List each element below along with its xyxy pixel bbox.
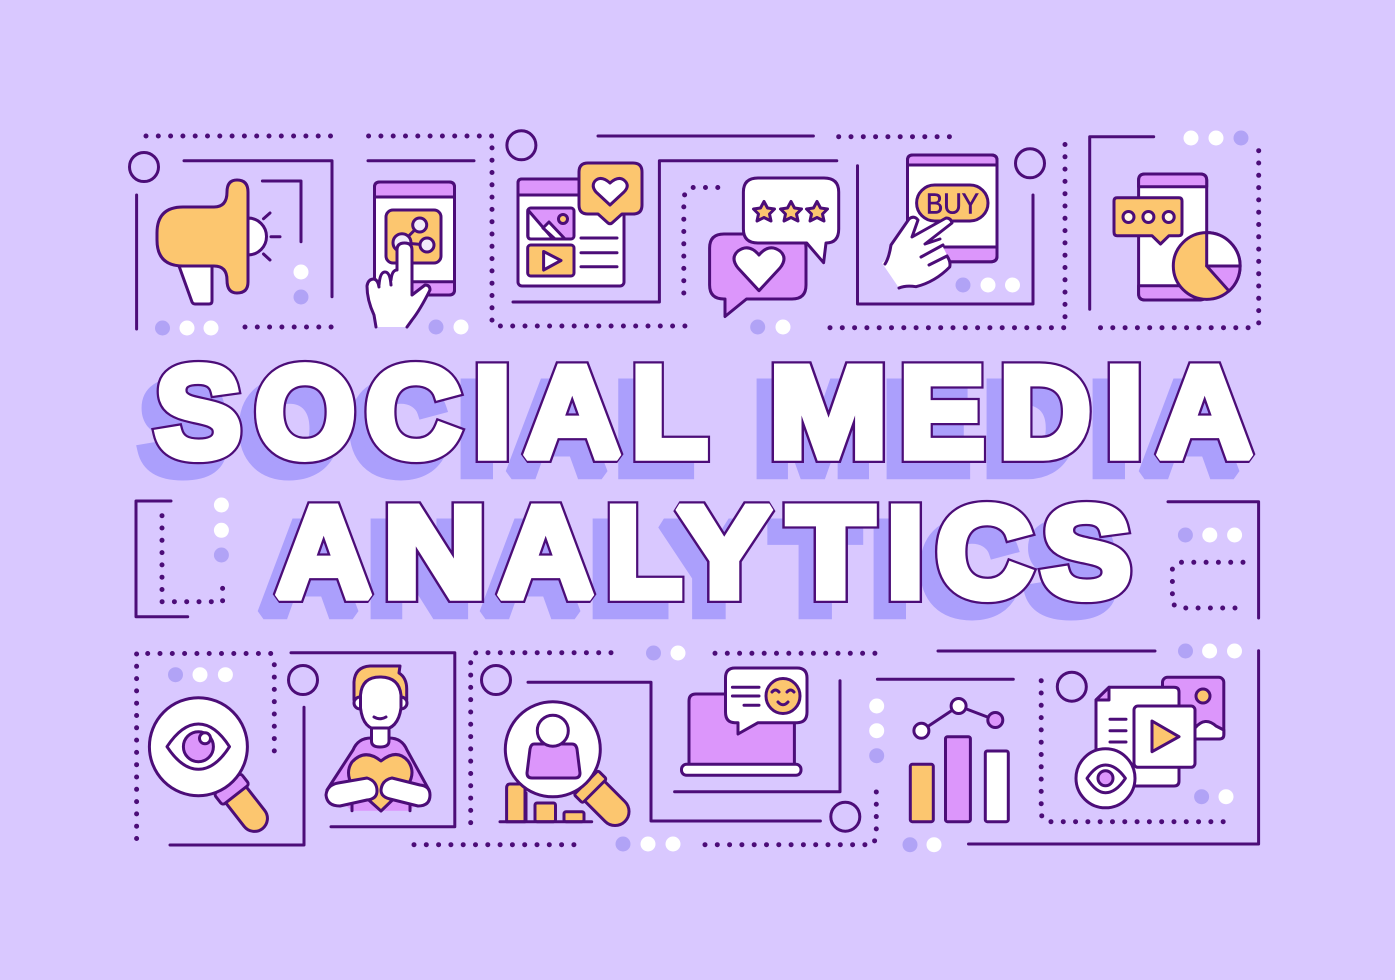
title shadow: C (350, 356, 445, 501)
title outline: I (473, 341, 511, 485)
title shadow: M (754, 356, 872, 501)
title text: E (900, 341, 985, 485)
title shadow (140, 356, 1237, 641)
title outline: C (366, 340, 461, 484)
title shadow: E (884, 358, 969, 501)
title text: I (473, 341, 511, 485)
title shadow: Y (662, 496, 756, 641)
title shadow: T (772, 497, 858, 641)
icon: megaphone (157, 180, 280, 304)
title outline: C (936, 479, 1032, 624)
button label: BUY (926, 188, 979, 220)
title shadow: C (921, 496, 1017, 641)
title shadow: D (984, 357, 1075, 501)
title outline: T (788, 480, 874, 624)
title text: M (769, 339, 887, 484)
icon: user search magnifier with bars (500, 702, 637, 833)
title text: A (1157, 339, 1253, 484)
title text: A (498, 479, 594, 624)
icon: phone with share button and pointing hand (367, 182, 454, 327)
title text: A (524, 340, 621, 484)
title text: L (606, 480, 682, 624)
icon: web page with like bubble (518, 163, 642, 286)
title shadow: A (1141, 356, 1237, 501)
title outline: S (1042, 480, 1131, 624)
title shadow: N (368, 497, 471, 641)
title text: A (276, 479, 372, 624)
title shadow: L (590, 496, 667, 641)
title text: O (255, 340, 355, 484)
title text: I (886, 481, 924, 625)
title outline: S (155, 340, 241, 484)
title outline: I (886, 481, 924, 625)
title outline: A (1157, 339, 1253, 484)
title outline: A (524, 340, 621, 484)
title shadow: O (240, 357, 340, 501)
title text: N (383, 480, 487, 624)
title text: C (366, 340, 461, 484)
title outline: E (900, 341, 985, 485)
title shadow: I (871, 498, 909, 641)
title outline: D (1000, 340, 1091, 485)
title outline: M (769, 339, 887, 484)
title text: T (788, 480, 874, 624)
title outline: L (631, 340, 708, 484)
icon: phone with buy button and hand (882, 155, 997, 288)
icon: laptop with chat bubble (682, 668, 807, 775)
icon: magnifier with eye (149, 698, 276, 839)
icon: media files with eye (1076, 677, 1224, 808)
title text: D (1000, 340, 1091, 485)
icon: bar and line chart (910, 698, 1008, 822)
title shadow: I (1090, 358, 1128, 501)
title text: Y (677, 479, 772, 624)
icon: person hugging heart (326, 666, 430, 811)
title shadow: A (508, 357, 605, 501)
title text: S (155, 340, 241, 484)
title outline: O (255, 340, 355, 484)
title text: S (1042, 480, 1131, 624)
title shadow: S (140, 357, 226, 501)
title shadow: A (260, 496, 356, 641)
title outline: N (383, 480, 487, 624)
icon: review speech bubbles (710, 178, 839, 316)
title shadow: I (458, 358, 496, 501)
decorative frames (130, 131, 1259, 847)
title outline (155, 339, 1253, 625)
title text: L (631, 340, 708, 484)
title (140, 339, 1253, 641)
title outline: I (1105, 341, 1143, 485)
title text: I (1105, 341, 1143, 485)
title text (155, 339, 1253, 625)
decorative dots (155, 130, 1248, 852)
title outline: A (276, 479, 372, 624)
title outline: L (606, 480, 682, 624)
title shadow: L (616, 356, 692, 501)
title shadow: S (1026, 497, 1116, 641)
title text: C (936, 479, 1032, 624)
title outline: Y (677, 479, 772, 624)
title shadow: A (482, 496, 578, 641)
title outline: A (498, 479, 594, 624)
icon: phone with message and pie chart (1114, 174, 1240, 300)
